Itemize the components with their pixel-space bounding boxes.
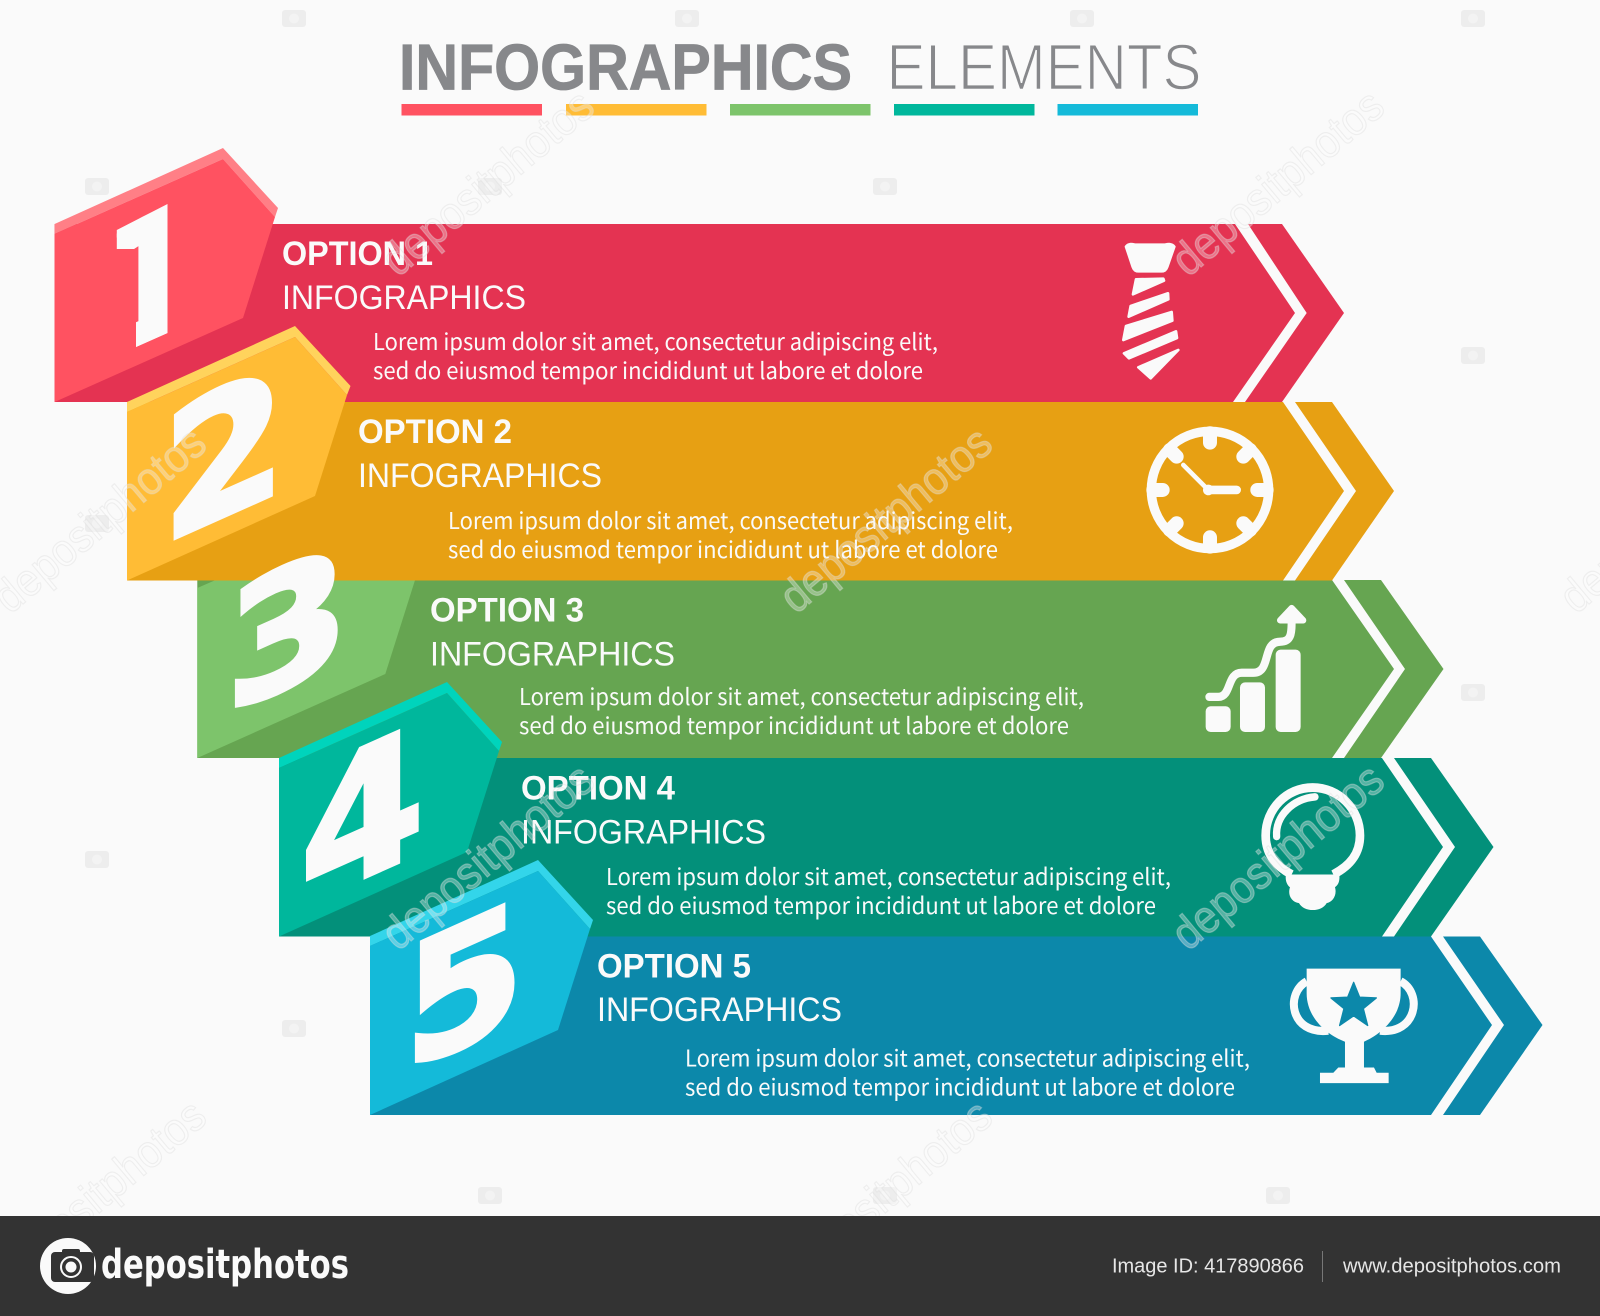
option 1 body text: Lorem ipsum dolor sit amet, consectetur adipiscing elit, (373, 323, 938, 357)
panel: option 3 (197, 515, 1443, 758)
depositphotos diagonal watermarks: depositphotos (769, 1089, 1002, 1296)
title: INFOGRAPHICS (399, 30, 852, 104)
option 2 badge highlight (127, 326, 350, 412)
option 1 numeral: 1 (92, 150, 216, 412)
panel: option 1 (55, 148, 1344, 412)
title: ELEMENTS (886, 30, 1202, 104)
option 1 body text (373, 323, 938, 386)
option 1 number badge (55, 159, 275, 402)
website url: www.depositphotos.com (1342, 1254, 1561, 1278)
option 3 body text: sed do eiusmod tempor incididunt ut labore et dolore (519, 707, 1069, 741)
option 5 body text (685, 1040, 1250, 1102)
icon: clock (1151, 431, 1269, 549)
option 2 body text: Lorem ipsum dolor sit amet, consectetur adipiscing elit, (448, 502, 1013, 536)
option 4 number badge (279, 693, 499, 936)
option 2 arrow band (127, 402, 1394, 580)
option 3 chevron (1332, 580, 1405, 758)
option 4 chevron (1382, 758, 1455, 936)
title (399, 30, 1202, 104)
option 3 body text (519, 678, 1084, 741)
watermark cameras (85, 10, 1485, 1204)
option 5 body text: sed do eiusmod tempor incididunt ut labore et dolore (685, 1068, 1235, 1102)
option 3 heading: OPTION 3 (430, 592, 584, 630)
option 4 body text: sed do eiusmod tempor incididunt ut labore et dolore (606, 887, 1156, 921)
icon: necktie (1123, 244, 1178, 378)
option 2 chevron (1283, 402, 1356, 580)
option 2 subheading: INFOGRAPHICS (358, 457, 602, 495)
footer logo icon: camera (40, 1238, 96, 1294)
option 4 subheading: INFOGRAPHICS (521, 814, 766, 852)
option 4 heading: OPTION 4 (521, 770, 675, 808)
option 4 body text (606, 858, 1171, 921)
option 3 number badge (197, 515, 417, 758)
option 4 arrow band (279, 758, 1494, 936)
option 2 body text (448, 502, 1013, 565)
panel: option 5 (370, 860, 1542, 1115)
panel: option 4 (279, 682, 1494, 948)
option 1 subheading: INFOGRAPHICS (282, 279, 526, 317)
option 1 chevron (1233, 224, 1307, 402)
option 1 heading: OPTION 1 (282, 235, 433, 273)
panel: option 2 (127, 326, 1394, 585)
option 5 badge highlight (370, 860, 593, 946)
option 1 body text: sed do eiusmod tempor incididunt ut labore et dolore (373, 352, 923, 386)
option 5 body text: Lorem ipsum dolor sit amet, consectetur adipiscing elit, (685, 1040, 1250, 1074)
option 3 body text: Lorem ipsum dolor sit amet, consectetur adipiscing elit, (519, 678, 1084, 712)
footer bar (0, 1216, 1600, 1316)
depositphotos diagonal watermarks: depositphotos (1161, 753, 1394, 960)
option 1 badge highlight (55, 148, 278, 234)
option 5 arrow band (370, 936, 1542, 1115)
icon: light bulb (1266, 788, 1360, 910)
option 4 numeral: 4 (300, 686, 424, 948)
option 5 numeral: 5 (404, 864, 524, 1112)
depositphotos diagonal watermarks: depositphotos (1161, 79, 1394, 286)
title colour underlines (402, 104, 1198, 116)
option 2 number badge (127, 337, 347, 580)
depositphotos diagonal watermarks: depositphotos (371, 753, 604, 960)
option 5 subheading: INFOGRAPHICS (597, 991, 842, 1029)
footer logo wordmark: depositphotos (101, 1242, 349, 1288)
icon: growth chart (1206, 608, 1303, 732)
option 3 subheading: INFOGRAPHICS (430, 636, 675, 674)
option 4 body text: Lorem ipsum dolor sit amet, consectetur adipiscing elit, (606, 858, 1171, 892)
option 2 body text: sed do eiusmod tempor incididunt ut labore et dolore (448, 531, 998, 565)
option 3 numeral: 3 (226, 508, 349, 753)
option 1 arrow band (55, 224, 1344, 402)
icon: trophy (1294, 969, 1414, 1083)
option 2 numeral: 2 (162, 326, 286, 585)
option 5 heading: OPTION 5 (597, 948, 751, 986)
depositphotos diagonal watermarks: depositphotos (769, 416, 1002, 623)
option 2 heading: OPTION 2 (358, 413, 512, 451)
option 5 number badge (370, 871, 590, 1115)
option 5 chevron (1431, 936, 1504, 1115)
depositphotos diagonal watermarks: depositphotos (371, 79, 604, 286)
option 4 badge highlight (279, 682, 502, 768)
image id: Image ID: 417890866 (1112, 1254, 1304, 1278)
option 3 arrow band (197, 580, 1443, 758)
